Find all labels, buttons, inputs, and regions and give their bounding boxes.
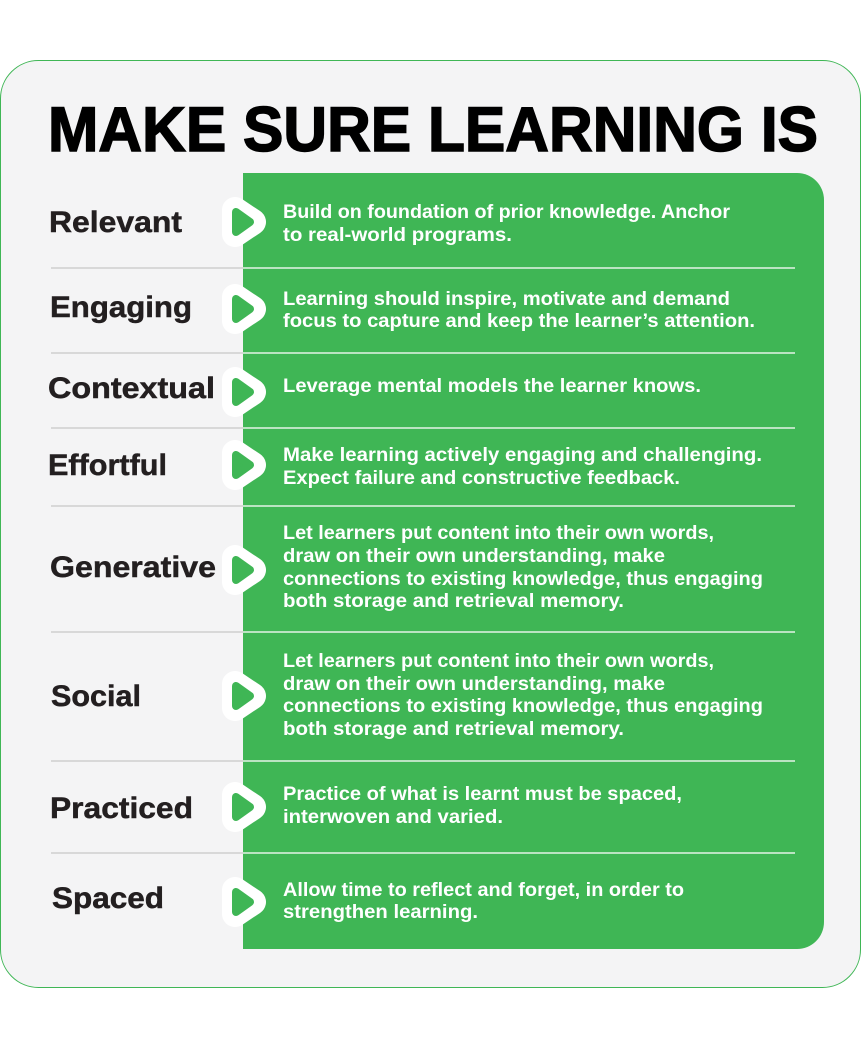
description: Social bbox=[283, 650, 763, 740]
icon: play arrow bbox=[235, 210, 253, 234]
description: Generative: draw on their own understanding, make bbox=[283, 545, 665, 567]
row: Practiced bbox=[50, 783, 682, 828]
description: Relevant: to real-world programs. bbox=[283, 224, 512, 246]
icon: play arrow bbox=[235, 558, 253, 582]
description: Social: draw on their own understanding, make bbox=[283, 673, 665, 695]
description: Engaging: focus to capture and keep the learner’s attention. bbox=[283, 310, 755, 332]
row: Spaced bbox=[52, 879, 684, 923]
description: Contextual: Leverage mental models the learner knows. bbox=[283, 375, 701, 397]
description: Spaced bbox=[283, 879, 684, 923]
description: Relevant bbox=[283, 201, 730, 246]
description: Practiced: interwoven and varied. bbox=[283, 806, 503, 828]
description: Practiced: Practice of what is learnt must be spaced, bbox=[283, 783, 682, 805]
icon: play arrow bbox=[235, 297, 253, 321]
icon: play arrow bbox=[235, 453, 253, 477]
description: Spaced: strengthen learning. bbox=[283, 901, 478, 923]
description: Generative: both storage and retrieval memory. bbox=[283, 590, 624, 612]
description: Relevant: Build on foundation of prior knowledge. Anchor bbox=[283, 201, 730, 223]
description: Social: connections to existing knowledge, thus engaging bbox=[283, 695, 763, 717]
description: Generative bbox=[283, 522, 763, 612]
label: Relevant: Relevant bbox=[49, 206, 182, 239]
label: Contextual: Contextual bbox=[48, 372, 215, 405]
icon: play arrow bbox=[235, 795, 253, 819]
description: Generative: Let learners put content into their own words, bbox=[283, 522, 714, 544]
row: Effortful bbox=[48, 444, 762, 489]
description: Practiced bbox=[283, 783, 682, 828]
icon: play arrow bbox=[235, 380, 253, 404]
label: Social: Social bbox=[51, 680, 141, 713]
row: Contextual bbox=[48, 372, 701, 405]
description: Spaced: Allow time to reflect and forget, in order to bbox=[283, 879, 684, 901]
icon: play arrow bbox=[235, 890, 253, 914]
panel: green descriptions bbox=[243, 173, 824, 949]
description: Effortful bbox=[283, 444, 762, 489]
description: Effortful: Make learning actively engaging and challenging. bbox=[283, 444, 762, 466]
description: Effortful: Expect failure and constructive feedback. bbox=[283, 467, 680, 489]
row: Generative bbox=[50, 522, 763, 612]
row: Engaging bbox=[50, 288, 755, 332]
icon: play arrow bbox=[235, 684, 253, 708]
description: Engaging bbox=[283, 288, 755, 332]
label: Effortful: Effortful bbox=[48, 449, 167, 482]
description: Engaging: Learning should inspire, motivate and demand bbox=[283, 288, 730, 310]
row: Relevant bbox=[49, 201, 730, 246]
row: Social bbox=[51, 650, 763, 740]
title: MAKE SURE LEARNING IS bbox=[48, 95, 818, 165]
description: Generative: connections to existing knowledge, thus engaging bbox=[283, 568, 763, 590]
label: Engaging: Engaging bbox=[50, 291, 192, 324]
description: Social: both storage and retrieval memory. bbox=[283, 718, 624, 740]
label: Spaced: Spaced bbox=[52, 882, 164, 915]
label: Generative: Generative bbox=[50, 551, 216, 584]
description: Social: Let learners put content into their own words, bbox=[283, 650, 714, 672]
label: Practiced: Practiced bbox=[50, 792, 193, 825]
